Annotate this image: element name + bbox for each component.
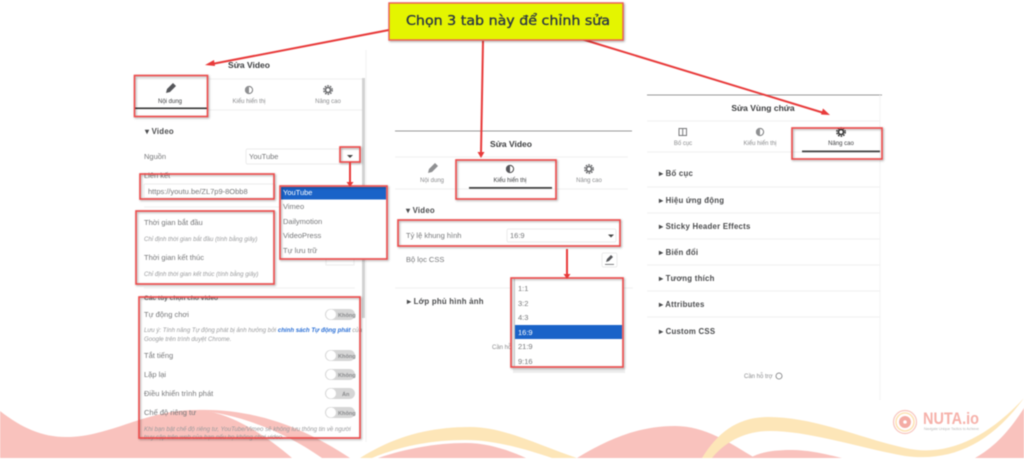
accordion list: ▸ Biến đổi [658,248,698,257]
highlight: advanced tab [792,128,882,159]
source field: YouTube [249,152,278,161]
panel heading: Sửa Video [228,60,270,70]
tab row: Kiểu hiển thị [232,98,266,105]
ratio dropdown list: 3:2 [518,299,528,308]
source dropdown list: YouTube [283,188,312,197]
time fields: Thời gian kết thúc [144,253,204,262]
accordion list: ▸ Sticky Header Effects [658,222,751,231]
source dropdown list: Tự lưu trữ [283,246,317,255]
highlight: video options [139,297,360,438]
link field: Liên kết [144,171,171,180]
logo: NUTA.io: Navigate Unique Tactics to Achieve [924,426,980,431]
video options: Tắt tiếng [144,351,173,360]
help text: Cần hỗ [492,344,512,351]
aspect ratio field: 16:9 [510,231,525,240]
source dropdown list: Vimeo [283,202,304,211]
video options: Không [338,354,356,360]
arrow: to source dropdown [346,162,354,187]
video options: truy cập trên web của bạn nếu họ không chơi video. [144,434,284,441]
ratio dropdown list: 16:9 [518,328,533,337]
tab row [674,128,880,152]
panel: advanced tab settings [647,95,882,400]
highlight: style tab [456,160,556,199]
arrow: callout to advanced tab [578,38,830,115]
tab row: Nội dung [420,178,444,184]
tab row: Nâng cao [576,178,603,184]
callout: title [389,3,623,40]
time fields: Chỉ định thời gian bắt đầu (tính bằng giây) [144,236,257,243]
source field: Nguồn [144,152,166,161]
tab row [135,83,342,109]
time fields: Thời gian bắt đầu [144,218,203,227]
callout: title: Chọn 3 tab này để chỉnh sửa [406,12,610,29]
arrow: callout to style tab [478,41,484,158]
section heading: image overlay: ▸ Lớp phủ hình ảnh [406,297,484,306]
ratio dropdown list [511,278,623,367]
accordion list: ▸ Custom CSS [658,327,715,336]
accordion list: ▸ Attributes [658,300,705,309]
logo: NUTA.io [894,410,980,434]
aspect ratio field [406,229,616,242]
CSS filter field: Bộ lọc CSS [406,255,444,264]
video options: Không [338,313,356,319]
ratio dropdown list: 4:3 [518,313,528,322]
video options [144,295,363,441]
video options: Tự động chơi [144,310,189,319]
time fields: Chỉ định thời gian kết thúc (tính bằng giây) [144,271,258,278]
source dropdown list: VideoPress [283,231,321,240]
highlight: link field [140,174,274,199]
ratio dropdown list: 21:9 [518,342,533,351]
logo: NUTA.io: NUTA.io [923,410,979,428]
panel: content tab settings [134,50,387,442]
tab row: Kiểu hiển thị [493,177,527,184]
source dropdown list [280,186,387,259]
arrow: callout to content tab [205,30,389,66]
help link: Cần hỗ trợ [744,373,773,380]
video options: Không [338,411,356,417]
source field [144,149,360,164]
video options: Lưu ý: Tính năng Tự động phát bị ảnh hưởng bởi chính sách Tự động phát của [144,327,363,334]
tab row: Kiểu hiển thị [743,140,777,147]
help link [744,373,782,380]
link field: https://youtu.be/ZL7p9-8Obb8 [148,187,248,196]
highlight: source dropdown [280,186,387,259]
panel heading: Sửa Vùng chứa [731,103,795,113]
panel heading: Sửa Video [490,139,532,149]
ratio dropdown list: 1:1 [518,284,528,293]
time fields [144,218,258,278]
video options: Các tùy chọn cho video [144,295,218,302]
tab row: Nâng cao [828,141,855,147]
video options: Chế độ riêng tư [144,408,196,417]
video options: Không [338,373,356,379]
video options: Google trên trình duyệt Chrome. [144,336,231,343]
highlight: time fields [136,211,274,284]
background waves [0,398,1024,462]
accordion list: ▸ Hiệu ứng động [658,196,724,205]
highlight: content tab [134,76,208,116]
link field [144,171,275,198]
aspect ratio field: Tỷ lệ khung hình [406,231,461,240]
tab row: Bố cục [674,141,692,147]
accordion list [647,169,880,336]
video options: Điều khiển trình phát [144,389,214,398]
panel: style tab settings [395,131,633,373]
source dropdown list: Dailymotion [283,217,322,226]
video options: Khi bạn bật chế độ riêng tư, YouTube/Vimeo sẽ không lưu thông tin về người [144,426,351,433]
highlight: dropdown arrow [340,147,360,162]
video options: Lặp lại [144,370,166,379]
highlight: ratio dropdown [511,278,623,367]
tab row: Nội dung [158,99,182,105]
tab row [420,163,603,189]
section heading: Video: ▾ Video [405,206,435,215]
highlight: aspect ratio field [398,220,620,246]
arrow: to ratio dropdown [564,249,570,279]
accordion list: ▸ Tương thích [658,274,715,283]
video options: Ẩn [342,391,350,398]
tab row: Nâng cao [315,99,342,105]
ratio dropdown list: 9:16 [518,357,533,366]
CSS filter field [406,253,617,267]
section heading: Video: ▾ Video [144,127,174,136]
accordion list: ▸ Bố cục [658,169,693,178]
